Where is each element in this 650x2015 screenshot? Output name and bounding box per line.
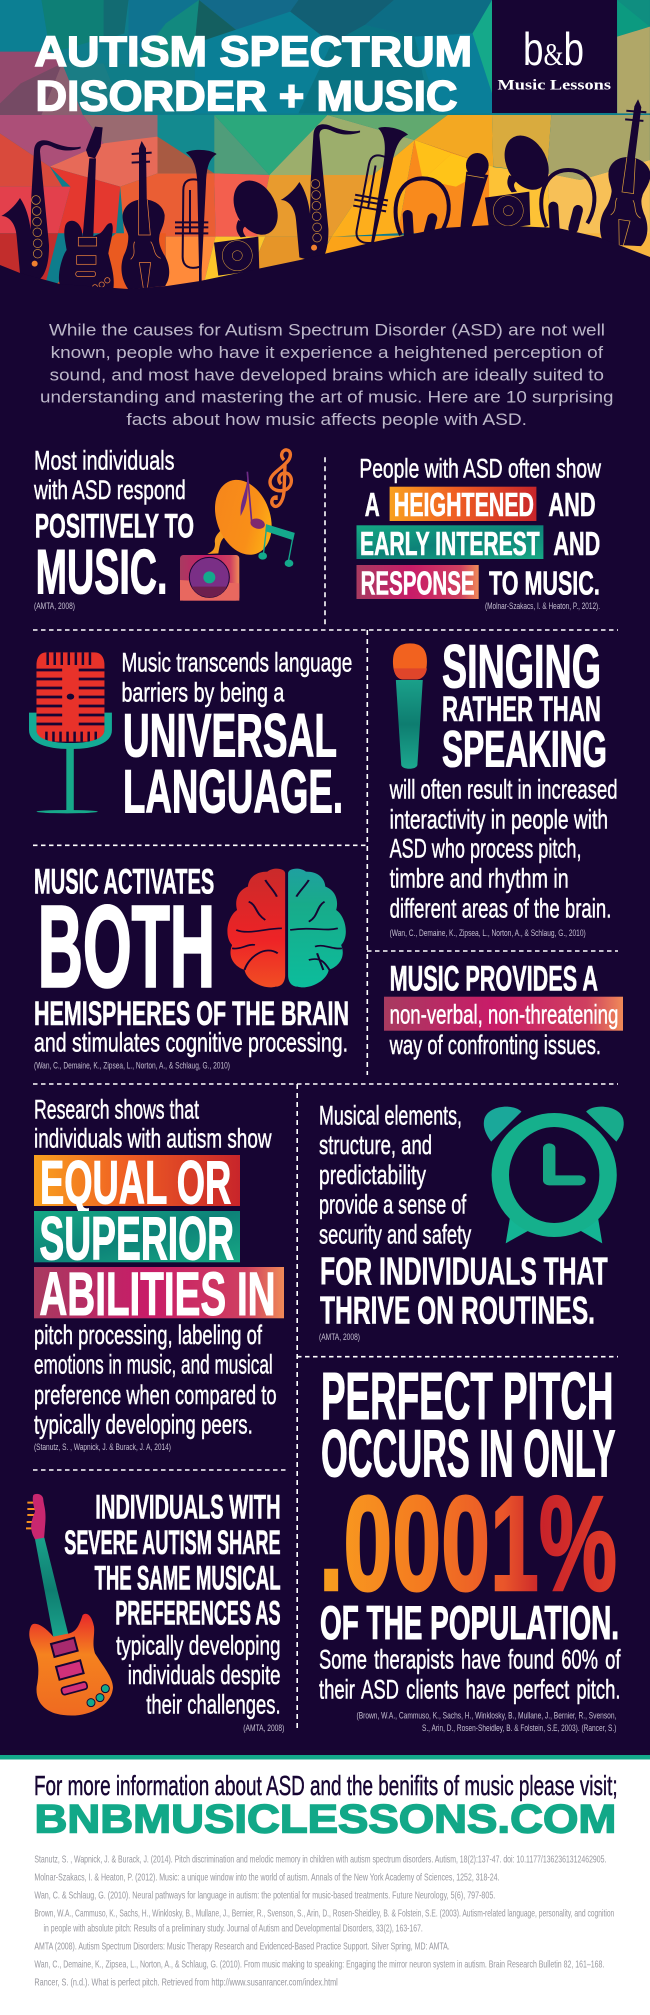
highlight: equal or (34, 1155, 240, 1206)
highlight: superior (34, 1211, 240, 1262)
icon: handheld microphone (460, 153, 489, 228)
panel: severe autism: PREFERENCES AS (115, 1595, 281, 1633)
header: low-poly background (0, 0, 650, 300)
panel: universal language: Music transcends language (122, 648, 352, 678)
logo: bnb Music Lessons: Music Lessons (498, 77, 611, 93)
panel: severe autism: INDIVIDUALS WITH (95, 1488, 281, 1526)
panel: severe autism: their challenges. (146, 1689, 281, 1719)
panel: severe autism: individuals despite (128, 1660, 281, 1690)
divider: horizontal 2 (33, 844, 367, 846)
panel: both hemispheres (34, 862, 349, 1071)
intro text (40, 320, 614, 429)
logo: bnb Music Lessons: b&b (523, 23, 584, 75)
panel: positively to music: with ASD respond (33, 475, 186, 505)
divider: horizontal 4 (33, 1083, 618, 1085)
panel: routines: (AMTA, 2008) (319, 1332, 360, 1343)
panel: equal or superior: individuals with autism show (34, 1123, 272, 1153)
highlight: early interest (356, 525, 543, 559)
panel: equal or superior (34, 1094, 284, 1453)
panel: equal or superior: EQUAL OR (40, 1148, 231, 1216)
icon: alarm clock (484, 1107, 624, 1243)
icon: brain (227, 869, 346, 987)
panel: severe autism: typically developing (116, 1630, 281, 1660)
panel: both hemispheres: (Wan, C., Demaine, K., Zipsea, L., Norton, A., & Schlaug, G., 2010) (34, 1060, 230, 1071)
divider: horizontal 6 (33, 1469, 289, 1471)
title: DISORDER + MUSIC (36, 72, 457, 120)
panel: positively to music: POSITIVELY TO (35, 507, 194, 545)
panel: heightened early interest: HEIGHTENED (394, 486, 534, 523)
divider: horizontal 5 (297, 1356, 618, 1358)
icon: saxophone (1, 140, 81, 279)
highlight: non-verbal band (384, 997, 623, 1031)
panel: positively to music: (AMTA, 2008) (34, 601, 75, 612)
highlight: response (356, 565, 479, 599)
panel: routines: structure, and (319, 1130, 432, 1160)
footer: references: in people with absolute pitch: Results of a preliminary study. Journal of Autism and Developmental Disorders, 33(2), 163-167. (44, 1922, 423, 1934)
footer: call to action: BNBMUSICLESSONS.COM (34, 1798, 616, 1842)
highlight: abilities in (34, 1267, 284, 1318)
intro text: facts about how music affects people with ASD. (126, 410, 527, 429)
panel: routines: Musical elements, (319, 1100, 462, 1130)
icon: headphones right (541, 170, 594, 230)
panel: universal language: UNIVERSAL (123, 702, 337, 770)
panel: singing rather than speaking (389, 633, 618, 939)
divider: vertical 3 (296, 1084, 298, 1732)
intro text: known, people who have it experience a heightened perception of (51, 343, 603, 362)
panel: severe autism: THE SAME MUSICAL (94, 1559, 281, 1597)
icon: saxophone right (281, 124, 360, 263)
panel: equal or superior: pitch processing, labeling of (34, 1320, 262, 1350)
icon: colourful guitar (26, 1494, 113, 1716)
panel: singing rather than speaking: timbre and rhythm in (390, 864, 569, 894)
panel: equal or superior: (Stanutz, S. , Wapnick, J. & Burack, J. A, 2014) (34, 1442, 171, 1453)
icon: retro microphone (33, 652, 108, 813)
panel: heightened early interest: A (365, 486, 380, 523)
panel: equal or superior: emotions in music, and musical (34, 1349, 273, 1379)
intro text: While the causes for Autism Spectrum Disorder (ASD) are not well (49, 320, 605, 340)
panel: routines (319, 1100, 624, 1343)
panel: both hemispheres: MUSIC ACTIVATES (34, 862, 214, 901)
panel: universal language: barriers by being a (122, 678, 285, 708)
divider: horizontal 3 (367, 950, 618, 952)
divider: horizontal 1 (33, 629, 618, 631)
divider: vertical (324, 457, 326, 625)
icon: gramophone right (485, 128, 557, 231)
panel: equal or superior: preference when compared to (34, 1380, 276, 1410)
icon: trumpet (175, 150, 217, 282)
panel: heightened early interest: EARLY INTEREST (360, 525, 540, 562)
panel: heightened early interest: (Molnar-Szakacs, I. & Heaton, P., 2012). (485, 601, 600, 612)
panel: heightened early interest: AND (553, 525, 600, 562)
panel: routines: security and safety (319, 1219, 472, 1249)
panel: severe autism (26, 1488, 284, 1734)
icon: violin right (597, 96, 650, 250)
title (34, 28, 472, 120)
footer: references: Rancer, S. (n.d.). What is perfect pitch. Retrieved from http://www.susanrancer.com/index.html (34, 1976, 338, 1988)
panel: both hemispheres: BOTH (38, 882, 215, 1012)
footer: call to action (34, 1770, 618, 1842)
panel: non-verbal (384, 960, 623, 1060)
panel: heightened early interest (356, 454, 601, 612)
panel: equal or superior: ABILITIES IN (39, 1260, 276, 1328)
icon: gramophone with record box (214, 173, 286, 276)
panel: routines: predictability (319, 1160, 426, 1190)
logo: bnb Music Lessons (492, 0, 617, 113)
icon: microphone (393, 643, 427, 769)
panel: equal or superior: Research shows that (34, 1094, 199, 1124)
footer: references (34, 1853, 614, 1988)
intro text: sound, and most have developed brains which are ideally suited to (50, 365, 604, 384)
panel: heightened early interest: RESPONSE (361, 564, 475, 601)
panel: positively to music (33, 445, 294, 612)
panel: severe autism: SEVERE AUTISM SHARE (64, 1524, 281, 1562)
panel: positively to music: Most individuals (34, 445, 174, 475)
panel: equal or superior: typically developing peers. (34, 1409, 253, 1439)
icon: violin (121, 141, 169, 289)
panel: heightened early interest: AND (548, 486, 596, 523)
footer: teal rule (0, 1755, 650, 1760)
footer: white area (0, 1755, 650, 2015)
title: AUTISM SPECTRUM (34, 28, 472, 76)
intro text: understanding and mastering the art of music. Here are 10 surprising (40, 388, 614, 407)
footer: references: AMTA (2008). Autism Spectrum Disorders: Music Therapy Research and Evidenced-Based Practice Support. Silver Spring, MD: AMTA. (34, 1940, 450, 1952)
panel: universal language: LANGUAGE. (123, 758, 343, 826)
highlight: heightened (390, 487, 536, 521)
panel: both hemispheres: HEMISPHERES OF THE BRAIN (34, 995, 349, 1033)
panel: routines: provide a sense of (319, 1189, 467, 1219)
panel: equal or superior: SUPERIOR (39, 1204, 234, 1272)
header: dark hill (0, 225, 650, 320)
panel: positively to music: MUSIC. (36, 537, 167, 607)
panel: severe autism: (AMTA, 2008) (243, 1723, 284, 1734)
divider: vertical 2 (366, 630, 368, 1075)
panel: universal language (33, 648, 352, 826)
panel: perfect pitch (319, 1359, 621, 1734)
panel: both hemispheres: and stimulates cognitive processing. (34, 1028, 348, 1058)
icon: colourful gramophone with notes (180, 450, 294, 601)
icon: electric guitar (59, 127, 114, 290)
icon: headphones (396, 178, 449, 238)
icon: trumpet right (345, 123, 409, 260)
